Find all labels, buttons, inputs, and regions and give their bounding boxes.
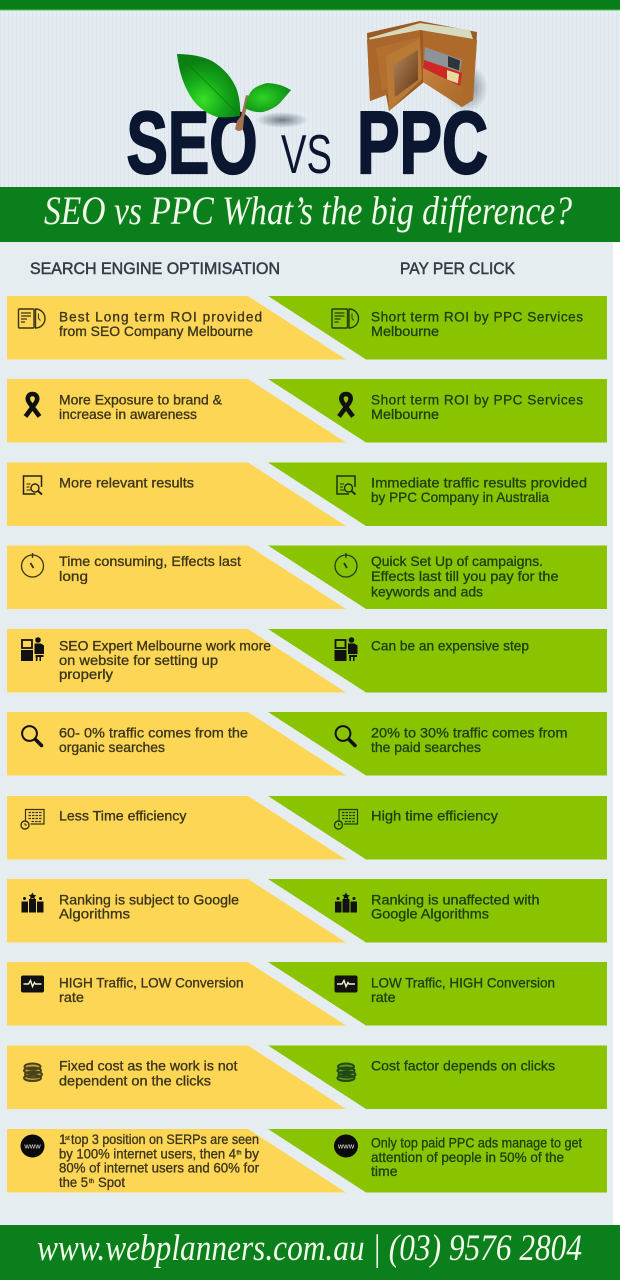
panel: PPC row 11: [268, 1129, 607, 1192]
panel: PPC row 9: [268, 962, 607, 1026]
text: SEO row 4: long: [59, 569, 88, 584]
panel: PPC row 4: [268, 546, 607, 609]
title word: SEO: SEO: [126, 93, 258, 192]
top bar: [0, 0, 620, 10]
panel: SEO row 7: [7, 796, 346, 860]
text: SEO row 9: HIGH Traffic, LOW Conversion: [59, 975, 244, 990]
panel: SEO row 11: [7, 1129, 346, 1192]
text: SEO row 5: SEO Expert Melbourne work more: [59, 638, 271, 654]
text: PPC row 3: by PPC Company in Australia: [371, 490, 549, 505]
text: SEO row 6: 60- 0% traffic comes from the: [59, 726, 248, 740]
text: SEO row 11: by: [244, 1146, 259, 1162]
text: SEO row 2: increase in awareness: [59, 407, 197, 422]
text: SEO row 11: top 3 position on SERPs are seen: [71, 1132, 259, 1147]
text: SEO row 6: organic searches: [59, 740, 165, 755]
panel: PPC row 8: [268, 879, 607, 942]
text: PPC row 4: Effects last till you pay for the: [371, 569, 558, 584]
title word: VS: VS: [281, 123, 332, 185]
row 8: [7, 879, 607, 942]
text: PPC row 11: time: [371, 1164, 398, 1179]
panel: PPC row 3: [268, 462, 607, 526]
panel: SEO row 6: [7, 712, 346, 776]
text: PPC row 5: Can be an expensive step: [371, 638, 529, 654]
icon: www globe: [20, 1134, 44, 1158]
icon: magnifier: [336, 726, 355, 746]
row 5: [7, 629, 607, 692]
panel: SEO row 9: [7, 962, 346, 1026]
icon: pulse monitor: [334, 976, 358, 992]
icon: ribbon: [339, 394, 353, 416]
icon: stopwatch: [335, 553, 357, 577]
panel: PPC row 5: [268, 629, 607, 692]
row 9: [7, 962, 607, 1026]
panel: PPC row 6: [268, 712, 607, 776]
footer banner: [0, 1225, 620, 1280]
row 11: [7, 1129, 607, 1192]
icon: green leaves: [177, 54, 308, 131]
text: SEO row 5: properly: [59, 667, 113, 682]
text: SEO row 11: the 5: [59, 1175, 88, 1190]
icon: ranking bars: [335, 892, 357, 912]
icon: stopwatch: [22, 553, 44, 577]
row 2: [7, 379, 607, 442]
row 3: [7, 462, 607, 526]
icon: search document: [24, 476, 42, 494]
header background: [0, 10, 620, 187]
panel: PPC row 1: [268, 296, 607, 360]
text: SEO row 10: Fixed cost as the work is not: [59, 1059, 238, 1074]
text: SEO row 11: th: [89, 1179, 94, 1185]
text: SEO row 9: rate: [59, 990, 84, 1005]
icon: pulse monitor: [21, 976, 44, 992]
text: SEO row 2: More Exposure to brand &: [59, 392, 222, 408]
icon: person at desk: [334, 637, 358, 661]
panel: SEO row 1: [7, 296, 346, 360]
text: SEO row 1: from SEO Company Melbourne: [59, 324, 253, 339]
icon: document and clock: [332, 309, 358, 328]
icon: ribbon: [26, 394, 40, 416]
text: PPC row 11: Only top paid PPC ads manage to get: [371, 1136, 582, 1150]
title word: PPC: PPC: [357, 93, 488, 192]
icon: calendar with clock: [334, 810, 358, 829]
text: PPC row 11: attention of people in 50% of the: [371, 1150, 564, 1165]
text: PPC row 2: Melbourne: [371, 407, 439, 422]
icon: coin stack: [338, 1064, 356, 1081]
icon: www globe: [334, 1134, 358, 1158]
text: SEO row 11: st: [65, 1136, 70, 1142]
text: PPC row 2: Short term ROI by PPC Services: [371, 392, 583, 408]
text: PPC row 7: High time efficiency: [371, 809, 498, 824]
text: PPC row 10: Cost factor depends on clicks: [371, 1059, 555, 1074]
panel: SEO row 3: [7, 462, 346, 526]
top bar highlight: [0, 10, 620, 11]
content background: [0, 241, 613, 1226]
icon: ranking bars: [22, 892, 44, 912]
heading banner: [0, 187, 620, 242]
text: PPC row 1: Melbourne: [371, 324, 439, 339]
text: PPC row 8: Google Algorithms: [371, 906, 489, 922]
row 6: [7, 712, 607, 776]
icon: document and clock: [18, 309, 45, 328]
text: PPC row 9: LOW Traffic, HIGH Conversion: [371, 975, 555, 990]
icon: person at desk: [21, 637, 44, 661]
text: SEO row 11: by 100% internet users, then 4: [59, 1146, 236, 1162]
panel: SEO row 8: [7, 879, 346, 942]
text: SEO row 3: More relevant results: [59, 476, 194, 490]
text: PPC row 3: Immediate traffic results provided: [371, 476, 587, 490]
text: SEO row 11: 1: [59, 1132, 67, 1147]
text: PPC row 4: Quick Set Up of campaigns.: [371, 554, 543, 569]
panel: SEO row 5: [7, 629, 346, 692]
text: SEO row 7: Less Time efficiency: [59, 809, 187, 824]
text: SEO row 8: Ranking is subject to Google: [59, 892, 239, 907]
column heading: search engine optimisation: SEARCH ENGINE OPTIMISATION: [30, 260, 280, 278]
icon: www globe: www: [337, 1142, 355, 1150]
text: PPC row 6: the paid searches: [371, 740, 481, 755]
text: SEO row 10: dependent on the clicks: [59, 1074, 211, 1088]
row 10: [7, 1046, 607, 1109]
text: PPC row 8: Ranking is unaffected with: [371, 892, 540, 907]
panel: PPC row 7: [268, 796, 607, 860]
icon: www globe: www: [23, 1142, 41, 1150]
text: SEO row 11: Spot: [98, 1175, 125, 1190]
row 7: [7, 796, 607, 860]
row 1: [7, 296, 607, 360]
icon: calendar with clock: [21, 810, 44, 829]
panel: SEO row 2: [7, 379, 346, 442]
text: SEO row 8: Algorithms: [59, 906, 130, 922]
text: PPC row 9: rate: [371, 990, 396, 1005]
icon: search document: [337, 476, 356, 494]
column heading: pay per click: PAY PER CLICK: [400, 260, 515, 278]
title: SEO vs PPC: [126, 93, 488, 192]
text: PPC row 4: keywords and ads: [371, 584, 483, 600]
text: SEO row 11: 80% of internet users and 60% for: [59, 1160, 259, 1176]
icon: magnifier: [22, 726, 42, 746]
panel: PPC row 10: [268, 1046, 607, 1109]
text: PPC row 6: 20% to 30% traffic comes from: [371, 726, 568, 740]
icon: coin stack: [24, 1064, 42, 1081]
text: PPC row 1: Short term ROI by PPC Services: [371, 310, 583, 324]
text: SEO row 5: on website for setting up: [59, 653, 218, 668]
panel: SEO row 10: [7, 1046, 346, 1109]
panel: SEO row 4: [7, 546, 346, 609]
text: SEO row 11: th: [236, 1150, 242, 1156]
panel: PPC row 2: [268, 379, 607, 442]
icon: brown wallet: [367, 21, 488, 112]
text: SEO row 1: Best Long term ROI provided: [59, 310, 262, 324]
text: SEO row 4: Time consuming, Effects last: [59, 554, 241, 569]
row 4: [7, 546, 607, 609]
